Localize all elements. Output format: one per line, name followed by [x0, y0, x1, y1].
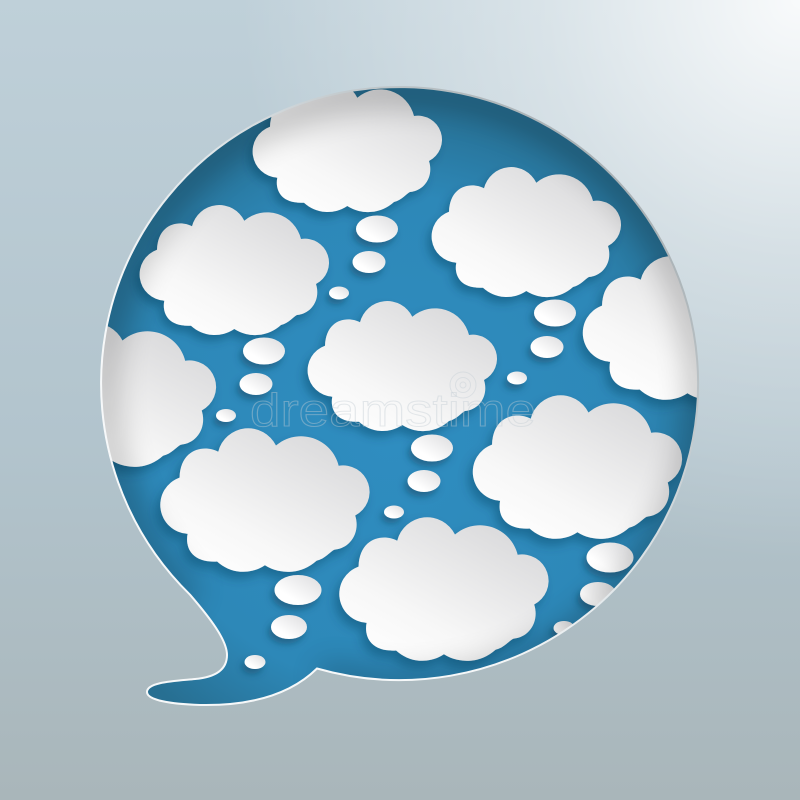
thought cloud 5, right edge: [575, 256, 698, 410]
thought cloud 2: [140, 205, 329, 422]
thought cloud 1: [253, 82, 442, 299]
bubble interior: [102, 88, 697, 704]
thought cloud 8: [473, 395, 682, 635]
speech bubble cut-out: [100, 86, 699, 706]
thought cloud 6, left edge: [102, 326, 216, 476]
thought cloud 7: [160, 428, 370, 669]
thought cloud 9: [339, 517, 549, 661]
watermark: [252, 372, 534, 428]
thought cloud 3: [432, 167, 621, 384]
bubble outline: [101, 87, 698, 705]
thought cloud 4: [308, 301, 497, 518]
watermark: dreamstime: [250, 384, 536, 436]
inner shadow of the cut-out: [104, 92, 701, 685]
